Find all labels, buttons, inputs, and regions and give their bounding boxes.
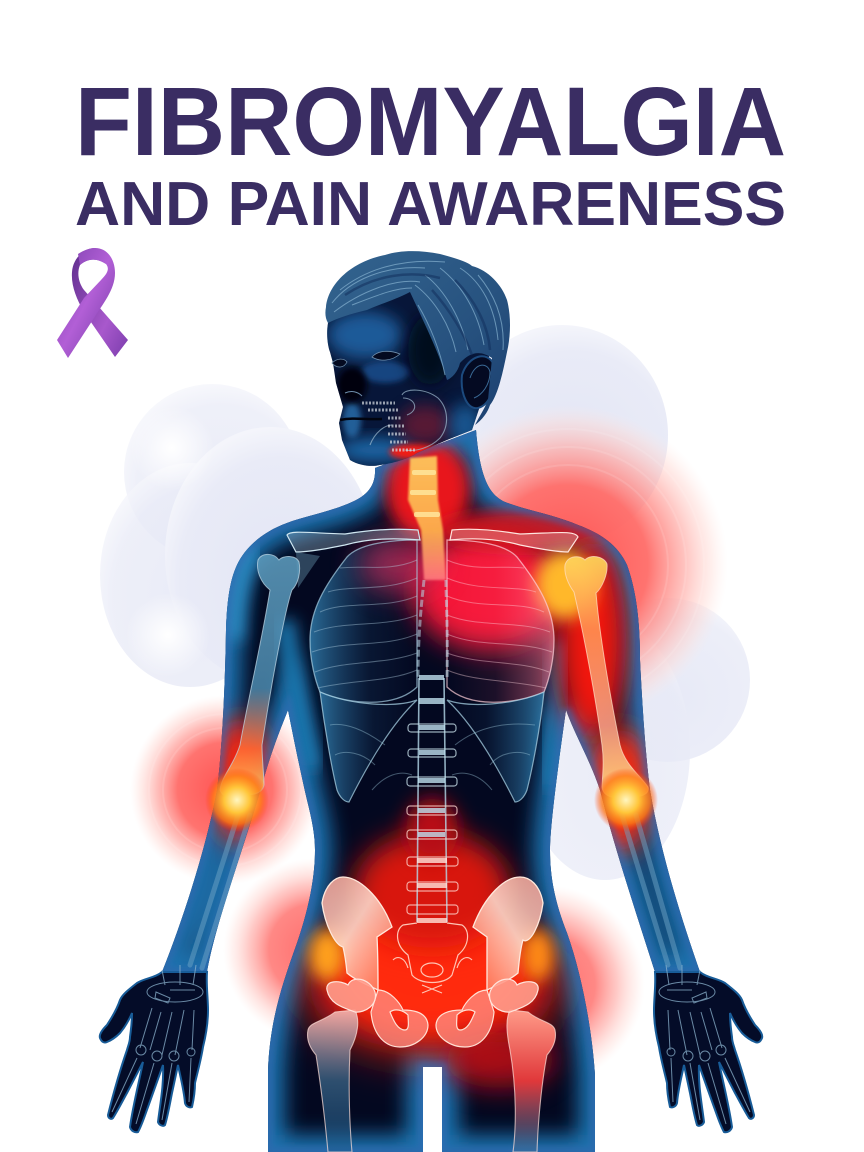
awareness ribbon	[57, 248, 128, 358]
right pubic loop	[436, 990, 494, 1047]
left hand	[100, 965, 208, 1132]
spine	[407, 456, 458, 923]
human body silhouette	[162, 430, 700, 1152]
left hand bones	[112, 965, 203, 1124]
title: FIBROMYALGIA	[75, 67, 786, 176]
right arm glow	[535, 540, 652, 852]
lower back and pelvis glow	[307, 798, 557, 1088]
right lung	[447, 540, 554, 702]
background clouds	[100, 325, 750, 880]
hair	[325, 251, 510, 425]
left elbow glow	[205, 768, 269, 832]
face	[327, 285, 490, 466]
sacrum	[393, 923, 472, 993]
cervical vertebrae	[408, 456, 446, 580]
subtitle: AND PAIN AWARENESS	[75, 170, 786, 239]
left arm bones	[190, 554, 300, 968]
collarbones	[287, 529, 578, 588]
pain rings: left elbow	[130, 695, 320, 885]
larynx outline	[370, 390, 447, 450]
right ilium	[473, 877, 543, 990]
trachea dots	[362, 403, 416, 450]
pain rings: right shoulder	[408, 405, 728, 725]
neck pain glow	[386, 440, 470, 540]
right femur	[490, 979, 556, 1152]
chest pain glow	[358, 510, 615, 650]
left ilium	[322, 877, 392, 990]
right arm bones	[565, 557, 680, 968]
blue body rim	[162, 430, 700, 1152]
pain rings: hips	[223, 858, 645, 1085]
left lung	[310, 540, 417, 702]
eyes	[372, 351, 400, 360]
right forearm bones	[622, 815, 680, 968]
lumbar ladder	[417, 678, 447, 922]
mouth	[340, 419, 382, 420]
lower ribs	[320, 692, 544, 802]
right elbow glow	[594, 768, 658, 832]
right hand bones	[659, 965, 750, 1124]
ribbon front band	[57, 248, 115, 358]
pelvis	[322, 877, 543, 1047]
ear	[462, 356, 495, 408]
ribcage and lungs	[310, 540, 554, 802]
nostril	[345, 392, 362, 396]
head and neck	[327, 285, 495, 466]
ribbon back band	[72, 248, 128, 357]
left forearm bones	[190, 815, 250, 968]
left femur	[307, 979, 375, 1152]
left arm glow	[210, 718, 270, 842]
blue rim over glows	[162, 430, 700, 1152]
right hand	[654, 965, 762, 1132]
left pubic loop	[371, 990, 428, 1047]
